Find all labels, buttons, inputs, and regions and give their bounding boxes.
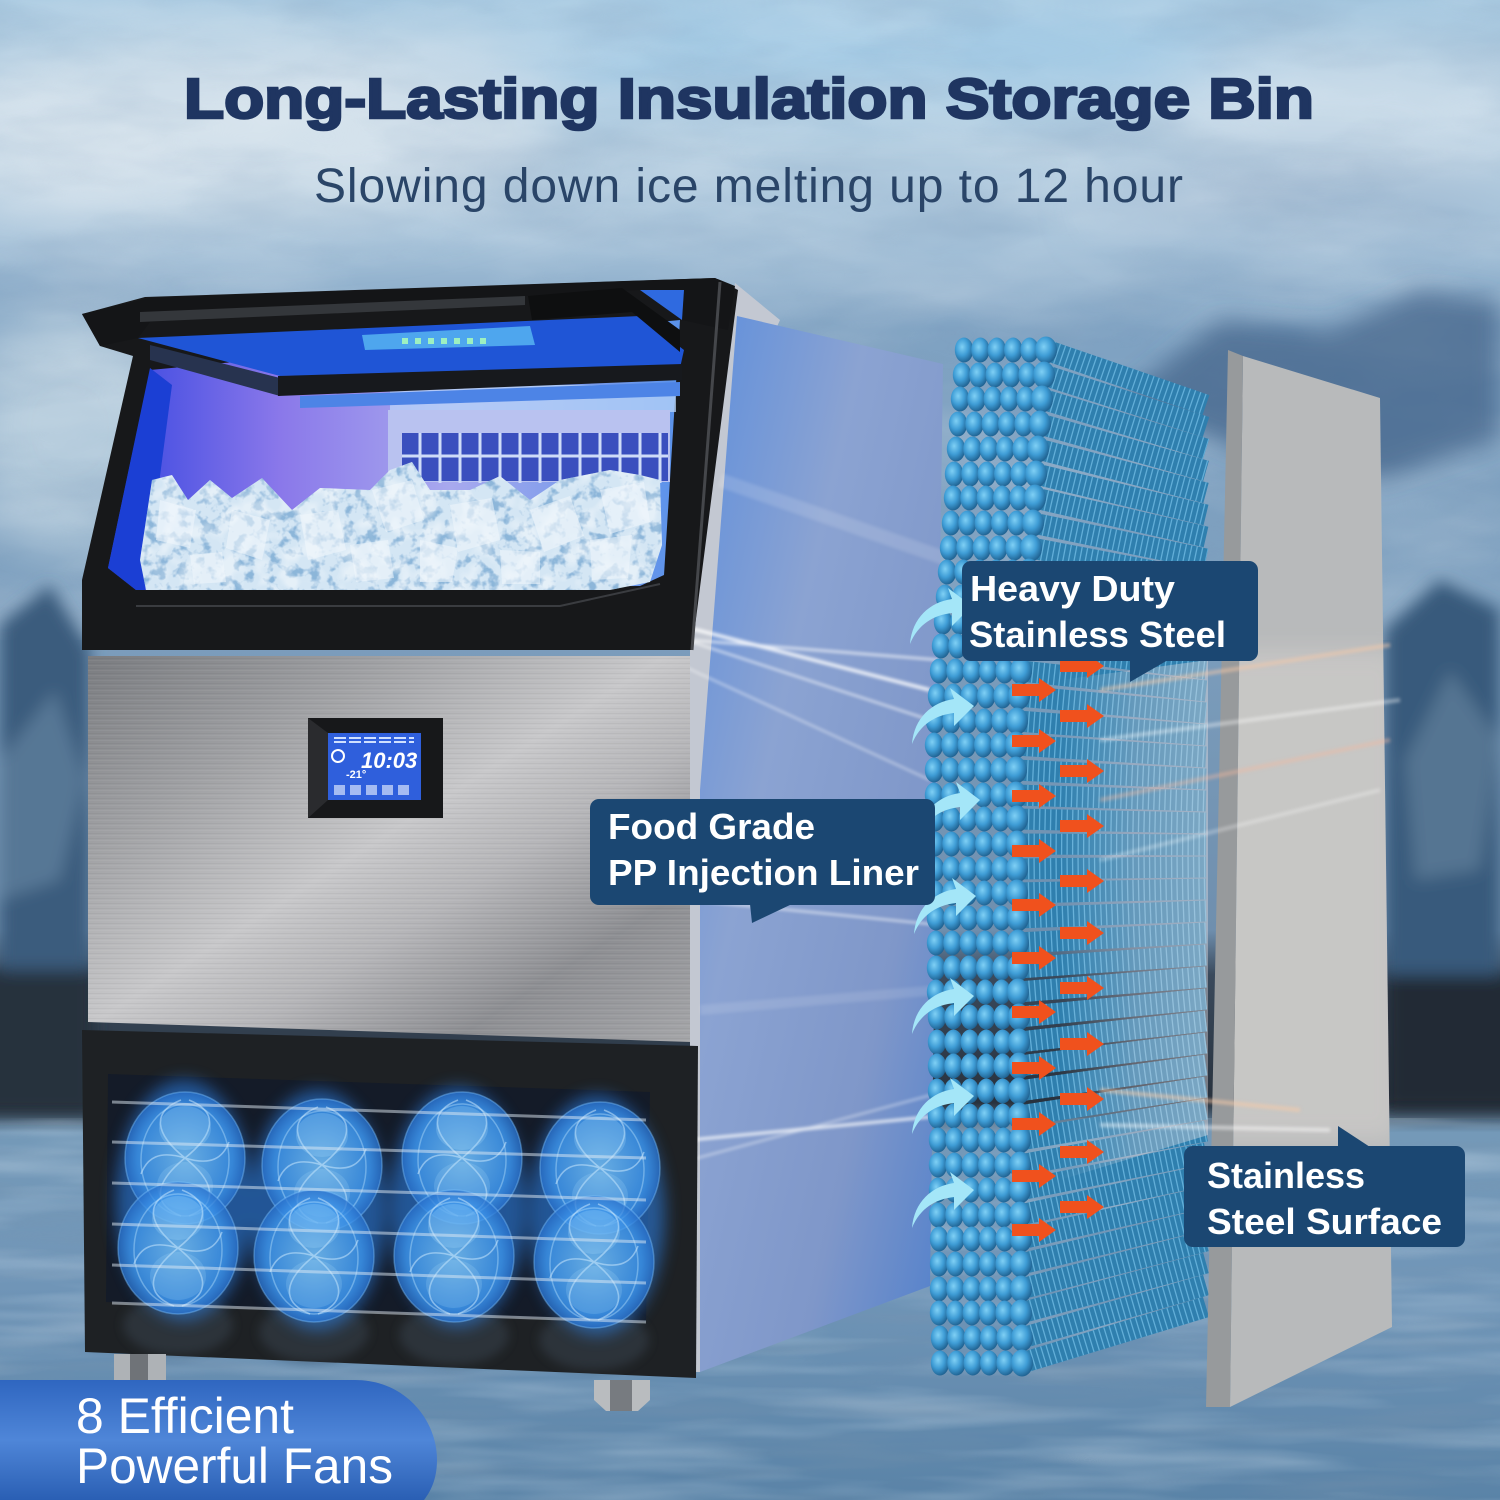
foam side rows	[1016, 350, 1206, 1363]
lid frame	[82, 278, 735, 650]
badge: 8 efficient powerful fans: Powerful Fans	[76, 1438, 393, 1494]
callout: food grade PP injection liner	[590, 799, 935, 923]
ice cubes	[130, 460, 670, 595]
badge: 8 efficient powerful fans: 8 Efficient	[76, 1388, 294, 1444]
fan glow	[116, 1080, 665, 1335]
stainless steel outer plate	[1200, 350, 1400, 1407]
callout: food grade PP injection liner: PP Injection Liner	[608, 852, 919, 893]
control display	[308, 718, 443, 818]
cooling fans	[118, 1092, 660, 1328]
callout: food grade PP injection liner: Food Grade	[608, 806, 815, 847]
ice bin window	[108, 316, 684, 595]
callout: stainless steel surface: Steel Surface	[1207, 1201, 1442, 1242]
callout: heavy duty stainless steel: Heavy Duty	[970, 568, 1175, 609]
subtitle: Slowing down ice melting up to 12 hour	[314, 160, 1183, 213]
heat streaks through foam	[1100, 645, 1400, 1130]
control display: -21°	[346, 769, 366, 781]
machine upper black housing	[82, 278, 738, 650]
title: Long-Lasting Insulation Storage Bin	[184, 67, 1314, 131]
cool airflow arrows	[910, 588, 980, 1228]
control display: 10:03	[361, 748, 417, 773]
callout: stainless steel surface: Stainless	[1207, 1155, 1365, 1196]
insulation foam block	[925, 336, 1208, 1376]
adjustable feet	[114, 1354, 650, 1411]
machine side panel	[600, 283, 950, 1372]
badge: 8 efficient powerful fans	[0, 1380, 437, 1500]
stainless steel door	[88, 656, 690, 1042]
lid underside	[138, 316, 684, 408]
ice maker grid	[388, 410, 670, 483]
callout: heavy duty stainless steel: Stainless Steel	[969, 614, 1226, 655]
callout: stainless steel surface	[1184, 1126, 1465, 1247]
foam front spheres	[925, 336, 1057, 1376]
ice machine	[82, 278, 950, 1411]
orange heat arrows	[1012, 654, 1104, 1242]
callout: heavy duty stainless steel	[962, 561, 1258, 682]
lower vent housing	[82, 1030, 698, 1378]
